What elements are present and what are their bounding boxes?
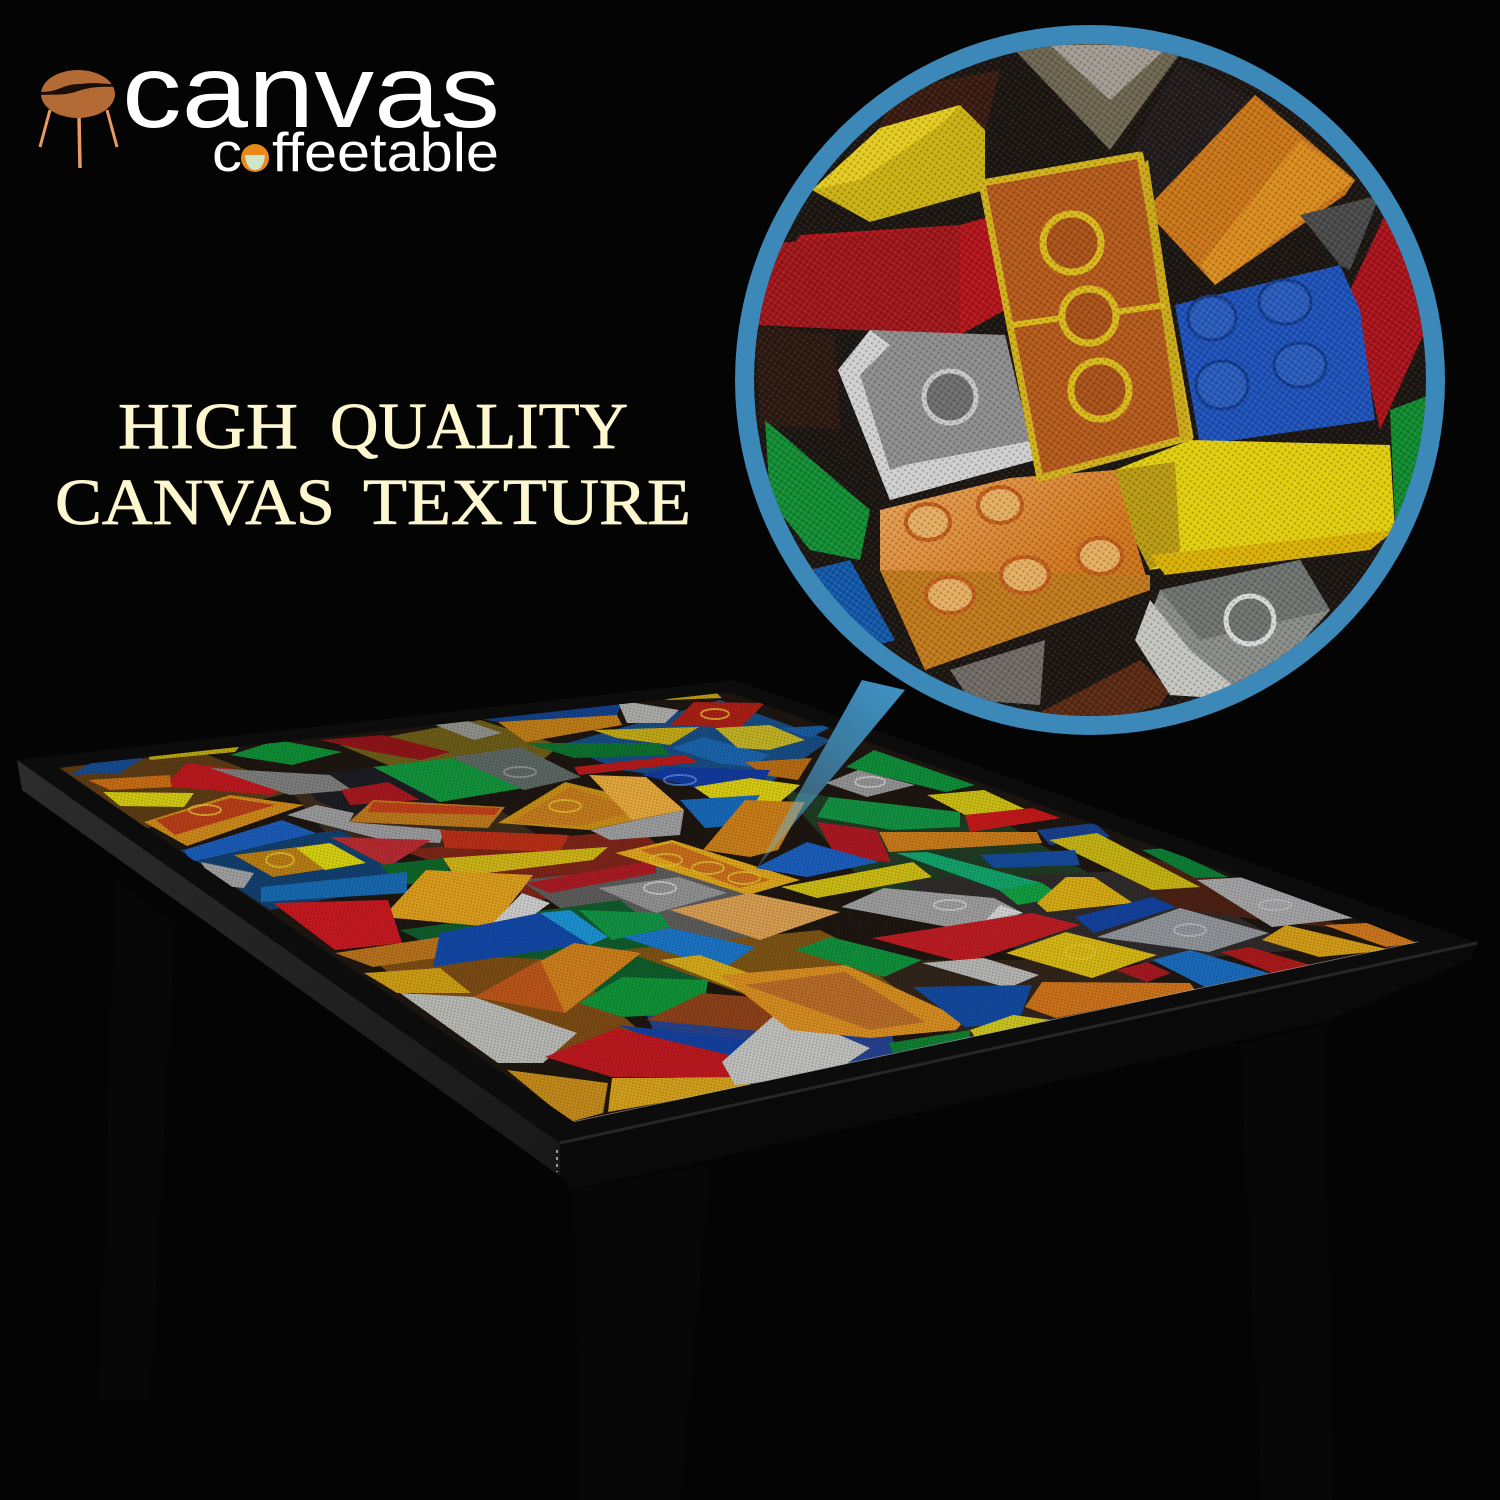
logo wordmark: canvas: canvas: [122, 34, 500, 150]
canvas table-top print: toy bricks: [58, 690, 1419, 1122]
logo: [40, 34, 500, 183]
heading: CANVAS: [55, 466, 335, 539]
callout pointer: [757, 680, 905, 868]
magnified canvas circle: [735, 25, 1445, 735]
heading: [55, 390, 691, 539]
logo wordmark: coffeetable: ffeetable: [272, 121, 499, 183]
underlay bricks: [60, 700, 1350, 1090]
table legs: [100, 880, 1332, 1500]
magnified bricks: [740, 30, 1440, 730]
logo wordmark: coffeetable: c: [212, 121, 242, 183]
heading: TEXTURE: [363, 466, 691, 539]
logo icon: coffee-bean table: [40, 70, 117, 168]
magnified centre brick: [982, 155, 1190, 478]
heading: QUALITY: [330, 390, 628, 463]
heading: HIGH: [118, 390, 298, 463]
table frame: [17, 680, 1477, 1190]
studs: [1188, 280, 1326, 409]
